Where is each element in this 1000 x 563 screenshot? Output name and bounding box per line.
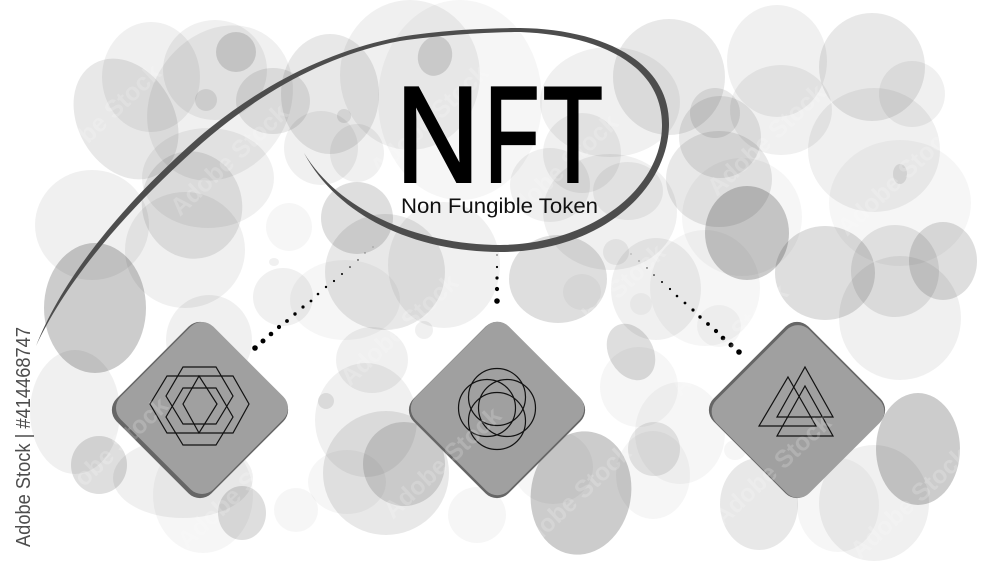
title: NFT: N xyxy=(396,59,479,211)
icon: overlapping circles xyxy=(458,368,536,450)
panel: circles token xyxy=(402,315,592,505)
watermark text: Adobe Stock xyxy=(542,239,671,361)
dotted connector: centre xyxy=(494,254,500,304)
dotted connector: left xyxy=(252,247,373,351)
watermark text: Adobe Stock xyxy=(172,432,301,554)
watermark text: Adobe Stock xyxy=(335,269,464,391)
title: NFT xyxy=(396,59,603,211)
subtitle: Non Fungible Token xyxy=(401,195,598,218)
panel: hexagon token xyxy=(105,315,295,505)
panel: triangles token xyxy=(702,315,892,505)
title: NFT: F xyxy=(484,60,539,211)
watermark text: Adobe Stock xyxy=(508,439,637,561)
watermark text: Adobe Stock xyxy=(365,59,494,181)
dotted connector: right xyxy=(631,254,742,355)
watermark text: Adobe Stock xyxy=(708,409,837,531)
watermark text: Adobe Stock xyxy=(495,109,624,231)
speech swoosh outline xyxy=(36,28,669,346)
watermark text: Adobe Stock xyxy=(165,99,294,221)
watermark text: Adobe Stock xyxy=(832,119,961,241)
watermark text: Adobe Stock xyxy=(378,402,507,524)
watermark text: Adobe Stock xyxy=(845,442,974,563)
icon: overlapping hexagons xyxy=(150,367,249,445)
watermark text: Adobe Stock xyxy=(702,79,831,201)
watermark text: Adobe Stock xyxy=(665,279,794,401)
stock id caption: Adobe Stock | #414468747 xyxy=(13,327,35,547)
watermark text: Adobe Stock xyxy=(45,392,174,514)
icon: overlapping triangles xyxy=(759,367,833,436)
watermark text: Adobe Stock xyxy=(38,59,167,181)
title: NFT: T xyxy=(543,60,603,211)
